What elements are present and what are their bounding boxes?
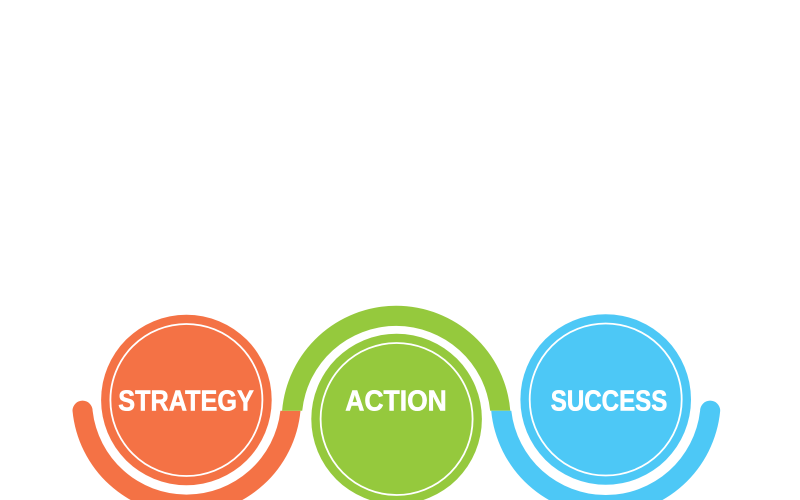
arc: green overarch (282, 306, 510, 411)
step: strategy (72, 315, 300, 500)
ring: strategy inner outline (110, 324, 262, 476)
step: action (282, 306, 510, 500)
label: action: ACTION (345, 386, 447, 418)
circle: success badge (520, 314, 691, 485)
step: success (491, 314, 720, 500)
circle: action badge (311, 334, 482, 500)
label: success: SUCCESS (551, 386, 667, 418)
arc: blue cradle (491, 401, 720, 500)
arc: orange cradle (72, 401, 300, 500)
circle: strategy badge (101, 315, 272, 485)
ring: success inner outline (530, 324, 682, 476)
ring: action inner outline (321, 343, 473, 495)
label: strategy: STRATEGY (118, 386, 254, 418)
